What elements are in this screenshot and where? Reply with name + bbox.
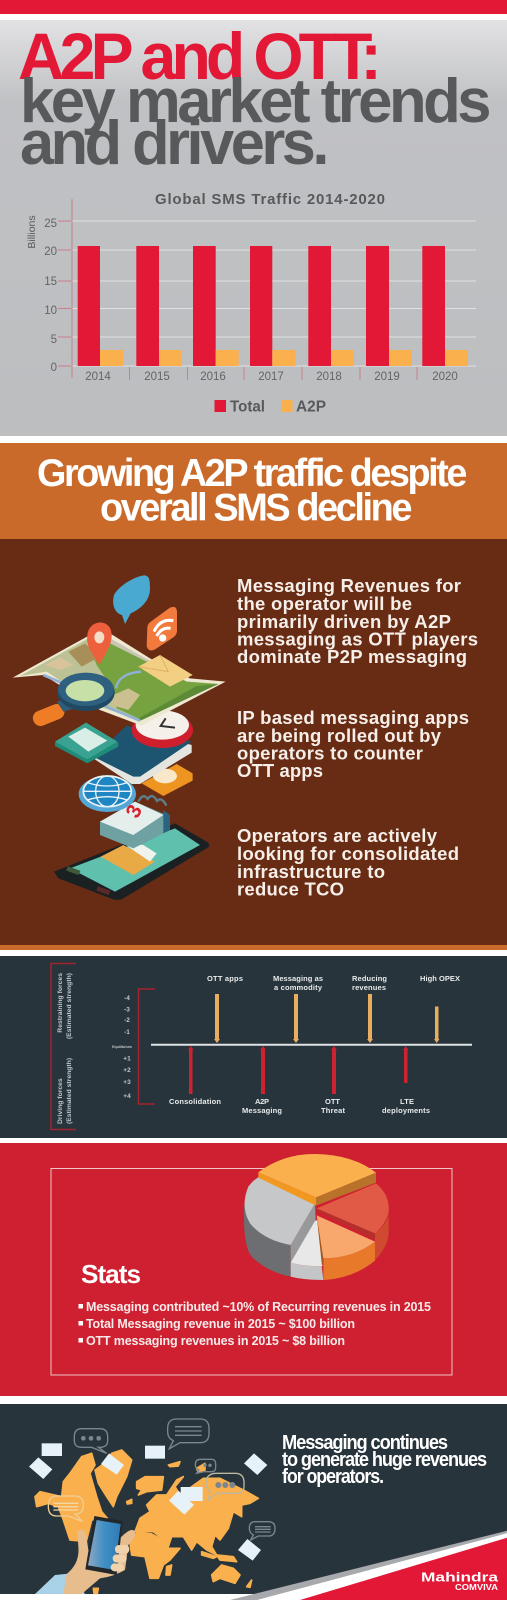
top red band	[0, 0, 507, 14]
text block: messaging revenues: the operator will be	[237, 593, 412, 614]
force axis labels: Restraining forces	[57, 973, 64, 1033]
stats list: Messaging contributed ~10% of Recurring revenues in 2015	[86, 1300, 431, 1314]
strength scale: +4	[123, 1093, 131, 1100]
stats list	[78, 1300, 431, 1348]
chart legend: A2P	[296, 398, 326, 416]
strength scale: -3	[124, 1006, 130, 1014]
title: and drivers.	[20, 109, 326, 178]
driving force labels: OTT	[325, 1097, 340, 1106]
text block: messaging revenues: dominate P2P messaging	[237, 646, 467, 667]
icon: clock	[132, 710, 193, 748]
driving force labels: deployments	[382, 1106, 430, 1115]
restraining force labels: OTT apps	[207, 974, 243, 983]
strength scale: +3	[123, 1079, 131, 1086]
icon: calendar	[100, 796, 170, 848]
bar chart: Global SMS Traffic	[26, 191, 476, 416]
icon: globe	[79, 776, 136, 812]
bar chart: Global SMS Traffic: 25	[44, 218, 57, 230]
bar chart: Global SMS Traffic: 2014	[85, 371, 111, 383]
equilibrium line	[151, 1044, 472, 1046]
text block: IP based messaging: OTT apps	[237, 760, 323, 781]
closing message	[282, 1432, 487, 1488]
title: A2P and OTT:	[18, 19, 377, 93]
driving force labels	[169, 1097, 430, 1115]
strength scale: Equilibrium	[112, 1045, 132, 1049]
force axis labels: Driving forces	[57, 1078, 64, 1124]
illustration: messages and hand	[29, 1419, 275, 1594]
panel: closing footer	[0, 1404, 507, 1594]
strength scale: +2	[123, 1067, 131, 1074]
inner bracket	[138, 989, 155, 1104]
stats frame	[51, 1168, 452, 1375]
world map	[35, 1450, 258, 1593]
chart legend	[214, 398, 326, 416]
message bubbles	[48, 1419, 275, 1540]
driving force arrows	[188, 1046, 408, 1094]
bar chart: Global SMS Traffic: 2016	[200, 371, 226, 383]
strength scale: -4	[124, 995, 130, 1002]
text block: consolidated infrastructure	[237, 825, 459, 900]
closing message: Messaging continues	[282, 1432, 448, 1454]
icon: magnifier	[31, 673, 115, 728]
panel: brown trends section	[0, 539, 507, 950]
force axis labels: (Estimated strength)	[66, 973, 73, 1039]
icon: picture tile	[55, 723, 118, 763]
restraining force labels: a commodity	[274, 983, 323, 992]
panel: force field analysis	[0, 956, 507, 1138]
stats heading: Stats	[81, 1259, 141, 1289]
strength scale: +1	[123, 1056, 131, 1062]
heading: growing A2P traffic: overall SMS decline	[100, 486, 412, 530]
driving force labels: A2P	[255, 1097, 269, 1106]
title: key market trends	[20, 67, 489, 136]
force axis labels: (Estimated strength)	[66, 1058, 73, 1124]
text block: consolidated infrastructure: reduce TCO	[237, 878, 344, 900]
strength scale: -1	[124, 1029, 130, 1036]
icon: book	[93, 726, 192, 784]
bar chart: Global SMS Traffic: 2018	[316, 371, 342, 383]
icon: envelope	[138, 655, 193, 687]
panel: orange heading band	[0, 443, 507, 539]
restraining force labels: High OPEX	[420, 974, 460, 983]
text block: IP based messaging	[237, 707, 469, 781]
text block: messaging revenues: messaging as OTT players	[237, 628, 478, 650]
bar chart: Global SMS Traffic: 20	[44, 246, 57, 258]
heading: growing A2P traffic	[37, 452, 467, 530]
panel: stats	[0, 1143, 507, 1396]
icon: phone	[54, 823, 209, 900]
bar chart: Global SMS Traffic: 0	[51, 362, 57, 374]
heading: growing A2P traffic: Growing A2P traffic despite	[37, 452, 467, 495]
icon: speech bubble	[113, 575, 150, 624]
text block: IP based messaging: operators to counter	[237, 742, 423, 764]
text block: IP based messaging: IP based messaging apps	[237, 707, 469, 728]
text block: IP based messaging: are being rolled out by	[237, 725, 442, 746]
illustration: isometric apps stack	[13, 575, 226, 900]
icon: pin centre	[94, 631, 104, 643]
icon: calendar: 3	[121, 801, 147, 822]
title	[18, 19, 489, 178]
icon: location pin	[87, 622, 112, 665]
bar chart: Global SMS Traffic: 2019	[374, 371, 400, 383]
logo: Mahindra Comviva: COMVIVA	[455, 1583, 498, 1592]
driving force labels: Consolidation	[169, 1097, 221, 1106]
text block: consolidated infrastructure: looking for consolidated	[237, 843, 459, 864]
envelopes	[29, 1443, 267, 1561]
bar chart: Global SMS Traffic: 5	[51, 334, 57, 346]
text block: messaging revenues: primarily driven by A2P	[237, 611, 451, 632]
driving force labels: Messaging	[242, 1106, 282, 1115]
bar chart: Global SMS Traffic: Billions	[26, 215, 38, 249]
driving force labels: Threat	[321, 1106, 346, 1115]
closing message: for operators.	[282, 1466, 384, 1488]
logo: Mahindra Comviva: Mahindra	[421, 1570, 499, 1584]
footer corner ribbon	[230, 1531, 507, 1600]
bar chart: Global SMS Traffic: 2020	[432, 371, 458, 383]
closing message: to generate huge revenues	[282, 1449, 487, 1471]
force axis labels	[57, 973, 73, 1124]
logo: Mahindra Comviva	[421, 1570, 499, 1592]
restraining force labels: Reducing	[352, 974, 387, 983]
panel: title and chart	[0, 19, 507, 436]
chart legend: Total	[230, 398, 265, 416]
bar chart: Global SMS Traffic: 2017	[258, 371, 284, 383]
outer bracket	[51, 964, 76, 1130]
restraining force labels: revenues	[352, 983, 386, 992]
text block: consolidated infrastructure: Operators are actively	[237, 825, 438, 846]
text block: messaging revenues	[237, 575, 478, 667]
icon: wifi tile	[147, 607, 177, 650]
restraining force labels: Messaging as	[273, 974, 323, 983]
stats list: OTT messaging revenues in 2015 ~ $8 billion	[86, 1334, 345, 1348]
pie chart	[244, 1154, 389, 1280]
stats list: Total Messaging revenue in 2015 ~ $100 billion	[86, 1317, 355, 1331]
bar chart: Global SMS Traffic: 15	[44, 276, 57, 288]
driving force labels: LTE	[400, 1097, 414, 1106]
icon: gear tile	[142, 764, 193, 796]
bar chart: Global SMS Traffic: 2015	[144, 371, 170, 383]
restraining force arrows	[214, 994, 440, 1043]
bar chart: Global SMS Traffic: 10	[44, 305, 57, 317]
restraining force labels	[207, 974, 460, 992]
icon: map	[13, 633, 226, 726]
strength scale: -2	[124, 1017, 130, 1024]
strength scale	[112, 995, 132, 1100]
text block: consolidated infrastructure: infrastructure to	[237, 861, 385, 882]
hand holding phone	[35, 1516, 135, 1594]
text block: messaging revenues: Messaging Revenues for	[237, 575, 461, 596]
bar chart: Global SMS Traffic: Global SMS Traffic 2014-2020	[155, 191, 385, 208]
